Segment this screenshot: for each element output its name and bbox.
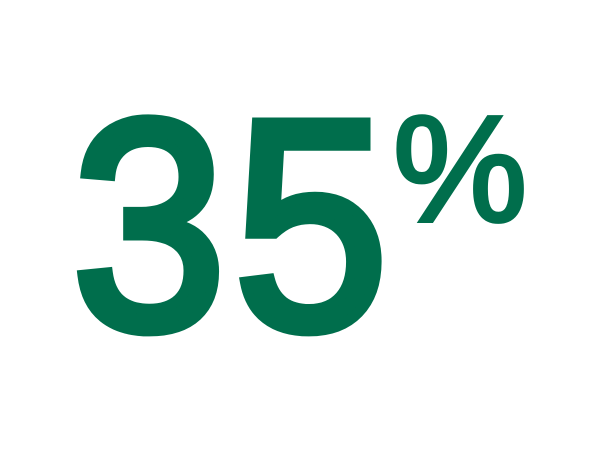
big number 35: 5 (234, 59, 388, 391)
percent sign: % (393, 84, 527, 253)
big number 35 (72, 59, 388, 391)
big number 35: 3 (72, 59, 226, 391)
